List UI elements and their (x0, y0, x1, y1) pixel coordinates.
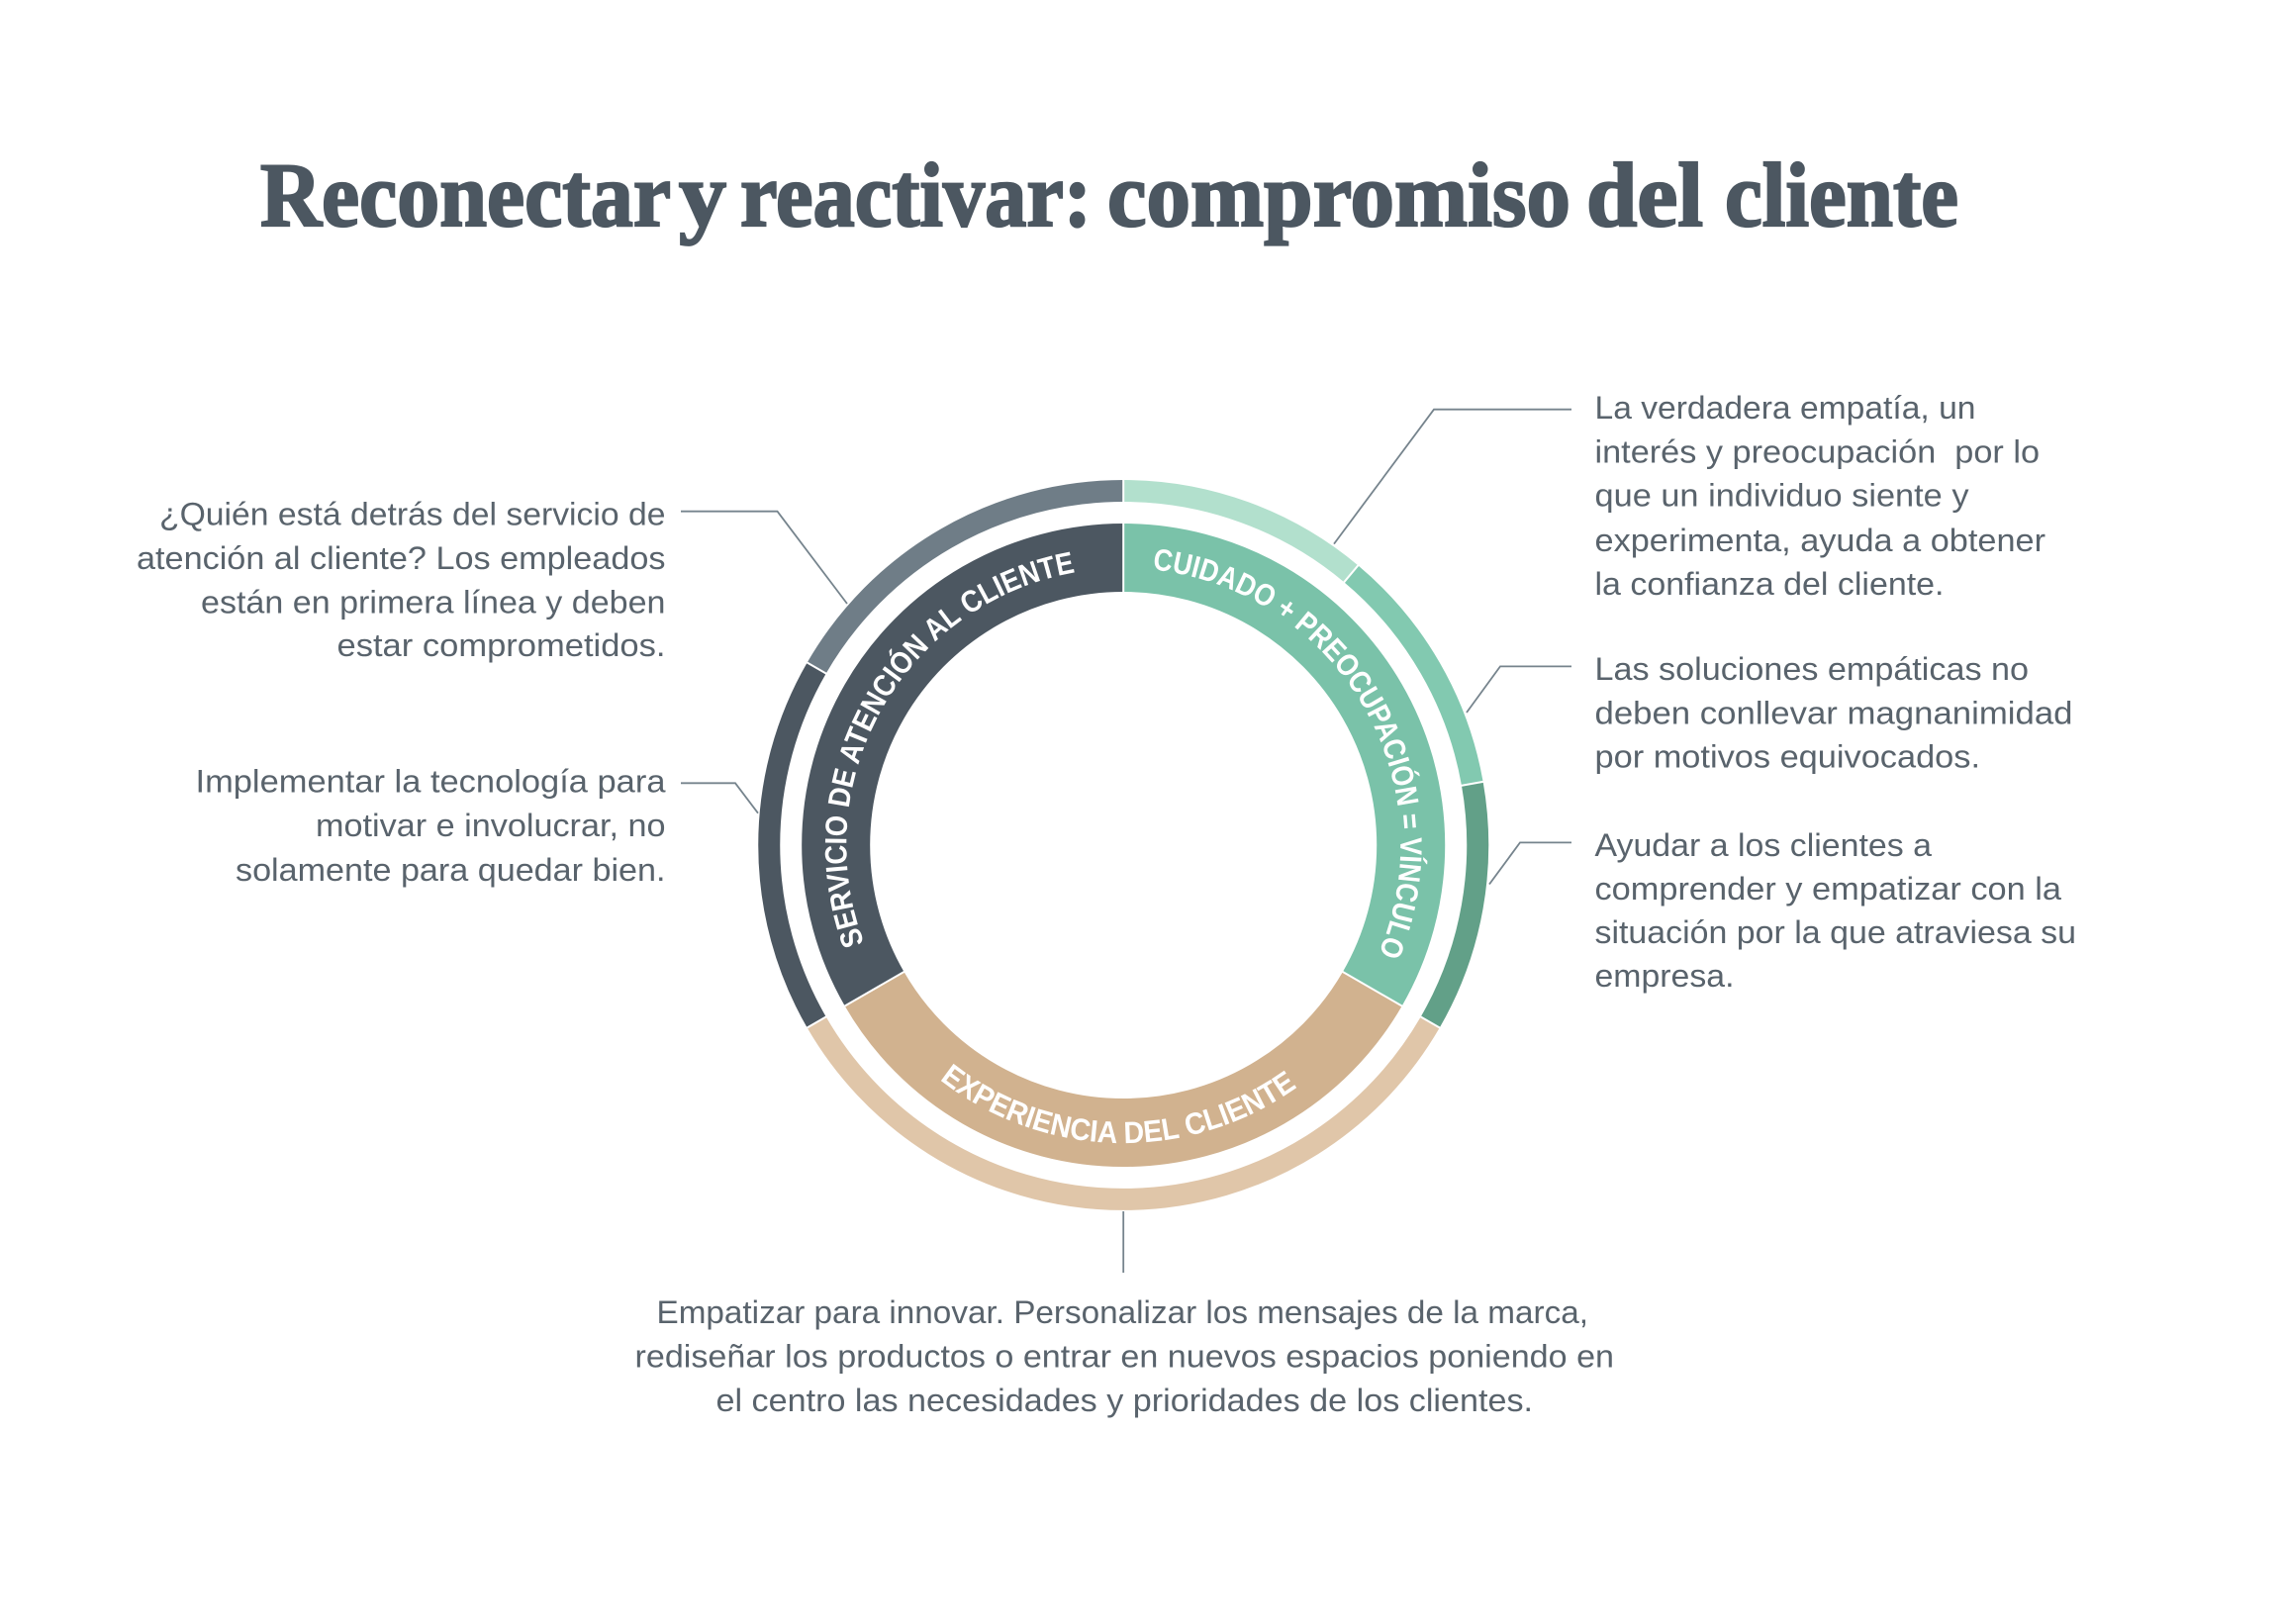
text block: technology (196, 764, 666, 888)
leader line: innovate (1122, 1211, 1124, 1273)
text block: technology: motivar e involucrar, no (316, 808, 665, 843)
title: compromiso (1107, 144, 1570, 245)
text block: employees (137, 497, 665, 663)
outer ring: dark slate segment (769, 668, 816, 1022)
inner ring: customer experience segment (875, 989, 1373, 1133)
text block: empathic solutions: Las soluciones empáticas no (1595, 651, 2029, 687)
text block: true empathy: La verdadera empatía, un (1595, 390, 1975, 426)
text block: true empathy (1595, 390, 2045, 602)
text block: true empathy: que un individuo siente y (1595, 477, 1969, 513)
title: reactivar: (740, 144, 1092, 245)
title (260, 144, 1958, 245)
outer ring: dark green segment (1430, 784, 1477, 1022)
leader line: empathic solutions (1467, 666, 1571, 713)
inner ring: customer service segment (836, 558, 1123, 989)
text block: empathic solutions: por motivos equivocados. (1595, 739, 1980, 775)
title: del (1586, 144, 1703, 245)
text block: help customers: situación por la que atraviesa su (1595, 914, 2076, 950)
text block: help customers (1595, 827, 2076, 994)
text block: employees: están en primera línea y deben (201, 584, 665, 620)
text block: empathic solutions: deben conllevar magnanimidad (1595, 695, 2072, 730)
text block: help customers: comprender y empatizar con la (1595, 871, 2062, 907)
text block: technology: Implementar la tecnología para (196, 764, 666, 800)
text block: technology: solamente para quedar bien. (236, 852, 665, 888)
text block: innovate: el centro las necesidades y prioridades de los clientes. (716, 1383, 1533, 1418)
outer ring: pale green segment (1123, 491, 1351, 574)
ring label: customer service: SERVICIO DE ATENCIÓN AL CLIENTE (825, 552, 1075, 948)
leader line: help customers (1489, 842, 1571, 885)
text block: innovate: rediseñar los productos o entrar en nuevos espacios poniendo en (635, 1339, 1614, 1375)
text block: help customers: empresa. (1595, 958, 1734, 994)
outer ring: light tan segment (816, 1022, 1430, 1199)
text block: employees: ¿Quién está detrás del servicio de (159, 497, 665, 532)
leader line: technology (681, 783, 758, 813)
ring diagram (758, 480, 1488, 1210)
text block: help customers: Ayudar a los clientes a (1595, 827, 1933, 863)
outer ring: light slate segment (816, 491, 1123, 668)
text block: innovate (635, 1294, 1614, 1418)
text block: true empathy: interés y preocupación por lo (1595, 433, 2040, 469)
title: y (679, 144, 726, 245)
title: cliente (1725, 144, 1958, 245)
text block: innovate: Empatizar para innovar. Personalizar los mensajes de la marca, (657, 1294, 1588, 1330)
ring label: care + concern = bond: CUIDADO + PREOCUPACIÓN = VÍNCULO (1154, 549, 1427, 958)
outer ring: mid green segment (1351, 574, 1473, 784)
leader line: employees (681, 512, 847, 604)
text block: employees: estar comprometidos. (336, 627, 665, 663)
title: Reconectar (260, 144, 671, 245)
leader line: true empathy (1334, 410, 1571, 544)
text block: employees: atención al cliente? Los empleados (137, 540, 665, 576)
text block: true empathy: experimenta, ayuda a obtener (1595, 523, 2045, 558)
ring label: customer experience: EXPERIENCIA DEL CLIENTE (941, 1063, 1296, 1144)
text block: true empathy: la confianza del cliente. (1595, 566, 1944, 602)
text block: empathic solutions (1595, 651, 2072, 775)
inner ring: care segment (1123, 558, 1411, 989)
